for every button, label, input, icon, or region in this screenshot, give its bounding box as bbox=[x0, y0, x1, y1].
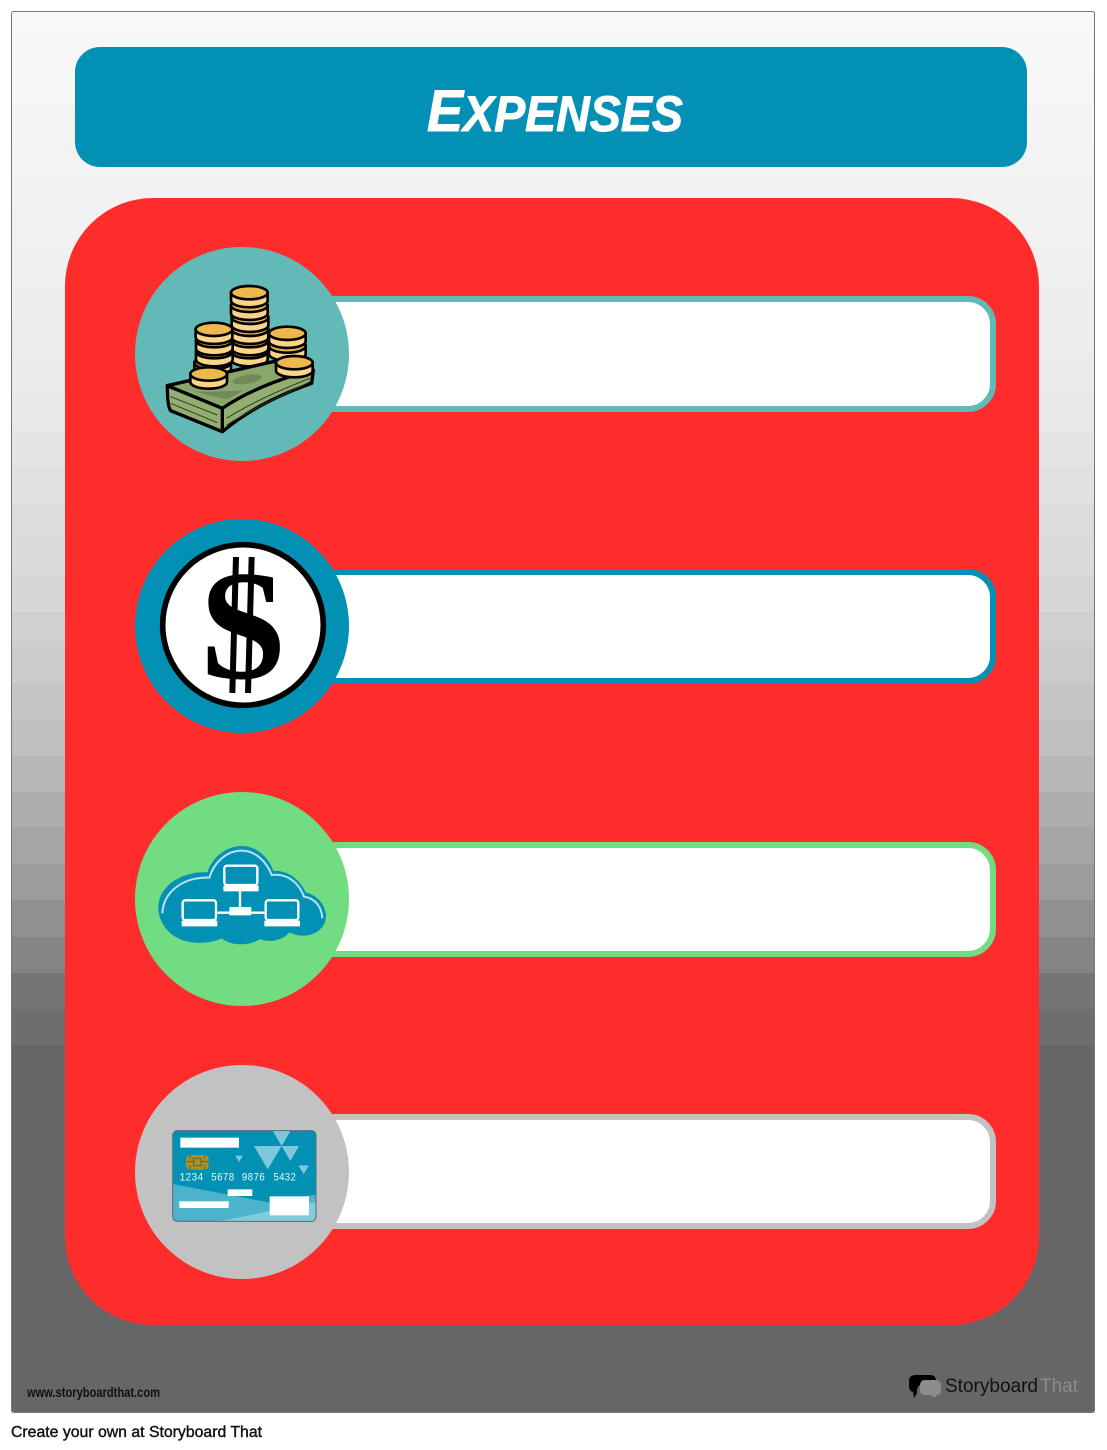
icon: credit card: 5678 bbox=[211, 1173, 234, 1185]
icon: credit card: 9876 bbox=[242, 1173, 265, 1185]
icon: credit card: 1234 bbox=[179, 1173, 203, 1185]
icon: dollar coin: S bbox=[199, 538, 287, 712]
storyboard that logo: Storyboard bbox=[945, 1376, 1038, 1397]
title: EXPENSES bbox=[427, 79, 683, 144]
icon: credit card: 5432 bbox=[273, 1173, 296, 1185]
storyboard that logo: That bbox=[1040, 1376, 1079, 1397]
icon: coins and banknotes bbox=[167, 286, 313, 432]
icon: credit card bbox=[173, 1131, 316, 1221]
row 4: credit card bbox=[135, 1065, 993, 1279]
row 2: dollar bbox=[135, 519, 993, 733]
row 3: cloud network bbox=[135, 792, 993, 1006]
icon: cloud network bbox=[158, 846, 326, 944]
row 1: money bbox=[135, 247, 993, 461]
red panel bbox=[65, 198, 1039, 1325]
footer caption: Create your own at Storyboard That bbox=[11, 1424, 263, 1441]
title banner bbox=[75, 47, 1027, 167]
icon: dollar coin bbox=[163, 538, 323, 712]
website url: www.storyboardthat.com bbox=[26, 1384, 160, 1400]
storyboard that logo bbox=[909, 1375, 1079, 1398]
